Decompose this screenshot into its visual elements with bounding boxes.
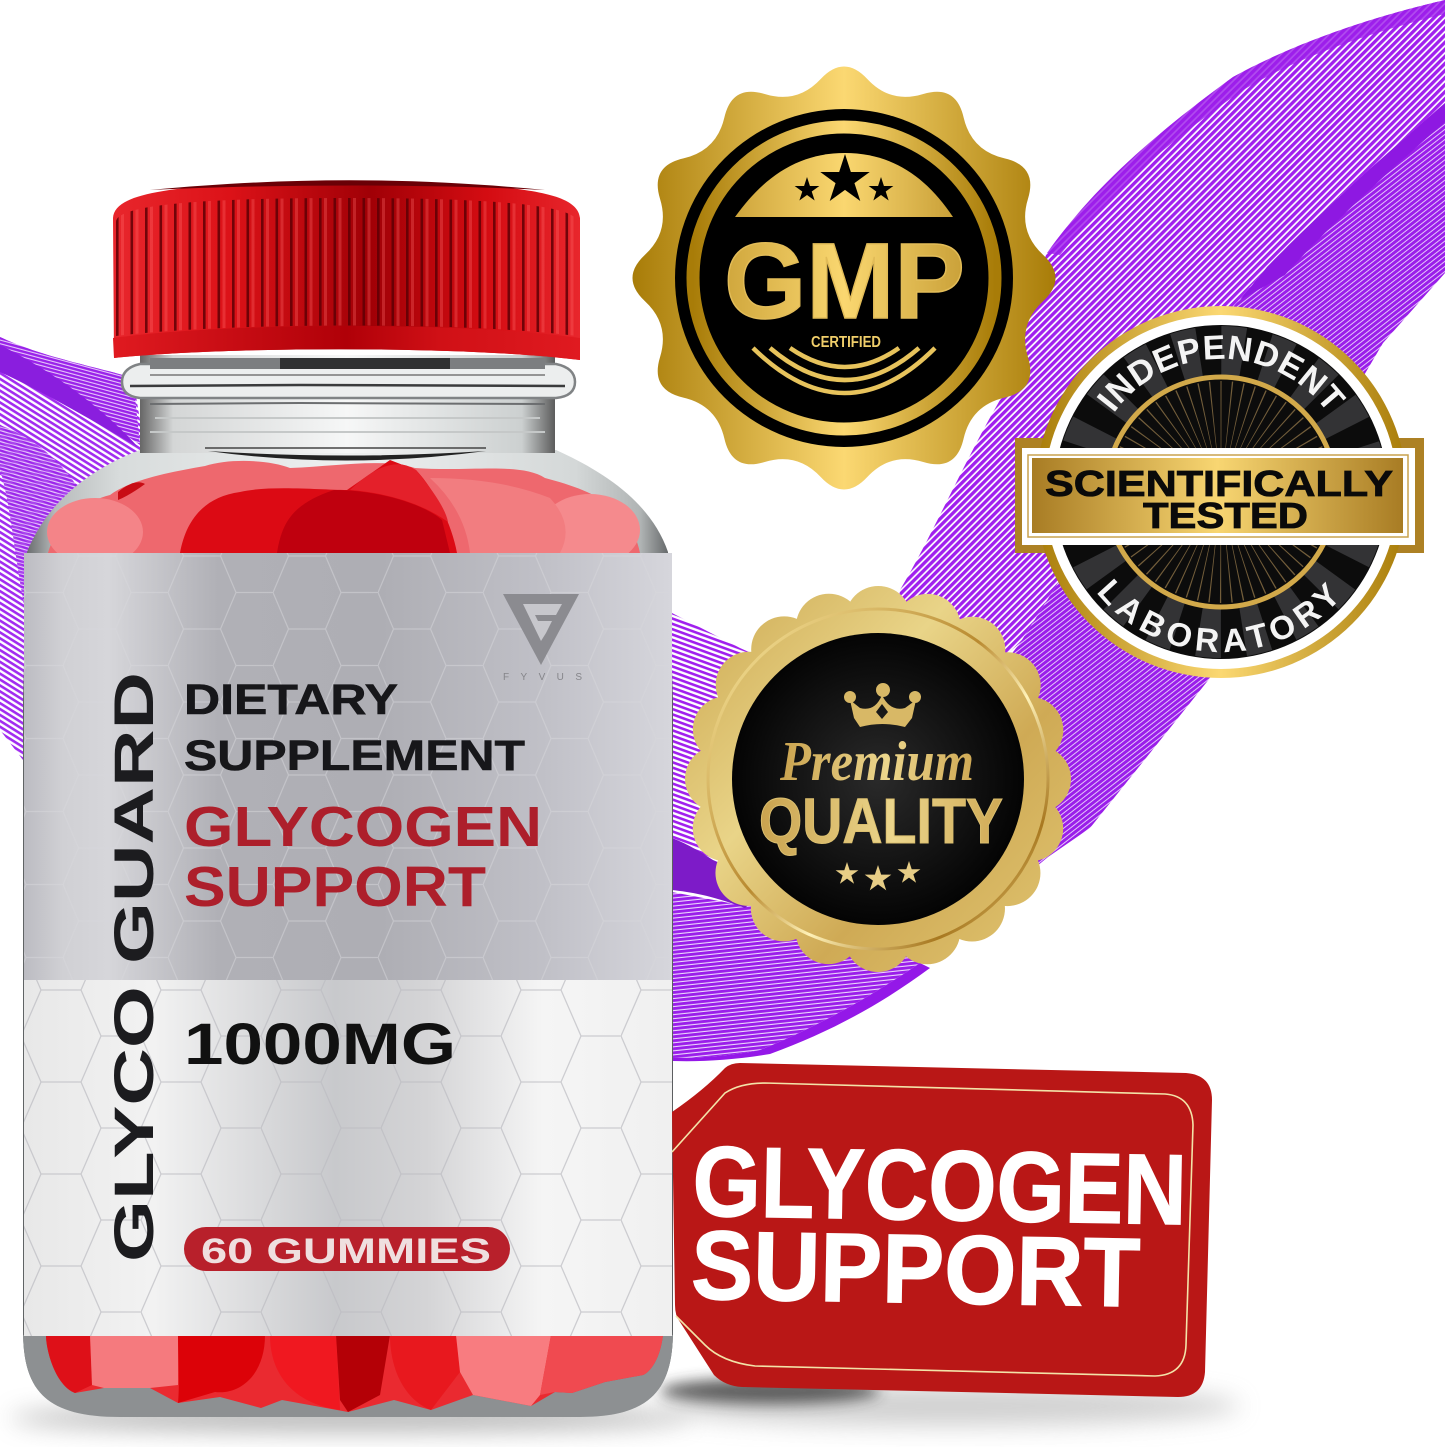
pill: 60 gummies: 60 GUMMIES	[201, 1232, 491, 1271]
lower stripes beside bottle	[672, 890, 1000, 1058]
pill: 60 gummies	[184, 1227, 510, 1271]
arcs	[753, 348, 935, 393]
tag headline: GLYCOGEN	[692, 1126, 1188, 1246]
gummies at top of jar	[47, 460, 640, 553]
three stars	[836, 861, 920, 890]
premium script text: Premium	[779, 731, 974, 793]
brand name, vertical: GLYCO GUARD	[102, 672, 165, 1262]
icon: Fyvus logo	[503, 594, 582, 683]
sunburst rays	[1155, 426, 1287, 558]
certified text: CERTIFIED	[811, 334, 881, 351]
scalloped gold seal	[700, 601, 1056, 957]
quality text: QUALITY	[759, 785, 1003, 857]
text: glycogen support on label	[184, 795, 542, 919]
label: grey upper panel	[24, 553, 672, 981]
scalloped gold seal	[632, 66, 1056, 490]
text: glycogen support on label: SUPPORT	[184, 855, 486, 919]
tag headline: SUPPORT	[690, 1210, 1141, 1327]
ground shadow	[10, 1378, 1240, 1432]
banner gold backing	[1015, 438, 1424, 553]
text: dietary supplement: DIETARY	[184, 676, 398, 724]
badge: independent laboratory	[1015, 306, 1424, 678]
product bottle	[23, 180, 673, 1420]
dark band	[672, 838, 770, 908]
banner: TESTED	[1143, 495, 1308, 536]
arc text bottom: LABORATORY	[1097, 578, 1336, 652]
icon: crown	[844, 683, 921, 727]
upper-left stripes beside bottle	[672, 613, 900, 880]
red ribbed cap	[113, 180, 580, 360]
text: glycogen support on label: GLYCOGEN	[184, 795, 542, 859]
bottle neck	[122, 355, 575, 460]
tag headline	[690, 1126, 1188, 1328]
red tag: glycogen support	[672, 1063, 1212, 1397]
label: white lower panel	[24, 980, 672, 1336]
GMP wordmark: GMP	[724, 220, 965, 341]
purple ribbon: left band	[0, 337, 145, 760]
arc text top: INDEPENDENT	[1096, 335, 1346, 412]
lower-right section	[900, 103, 1445, 963]
purple ribbon: right sweep	[672, 0, 1445, 1061]
gummies at bottom of jar	[23, 1335, 673, 1420]
text: 1000MG: 1000MG	[184, 1012, 456, 1077]
badge: GMP certified	[632, 66, 1056, 490]
grey ring segments	[1080, 351, 1362, 633]
main sweep toward top right	[880, 0, 1445, 760]
banner: SCIENTIFICALLY	[1045, 463, 1393, 504]
gold dome with stars	[735, 153, 953, 217]
banner	[1022, 448, 1415, 545]
text: dietary supplement: SUPPLEMENT	[184, 732, 525, 780]
text: dietary supplement	[184, 676, 525, 780]
tag inner line	[672, 1083, 1193, 1376]
icon: Fyvus logo: FYVUS	[503, 672, 582, 683]
bottle glass body	[23, 450, 673, 1417]
badge: premium quality	[700, 601, 1056, 957]
